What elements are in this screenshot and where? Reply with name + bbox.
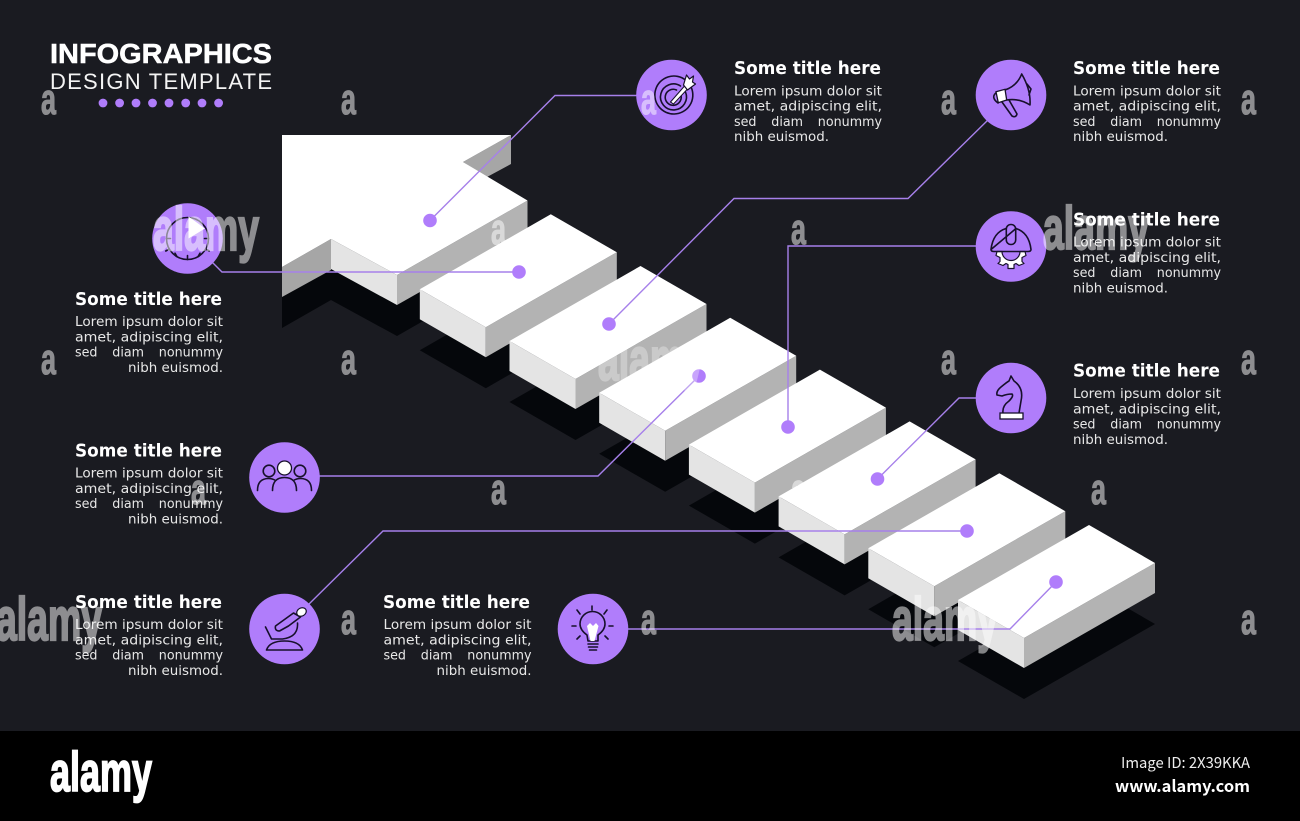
text block: top right: sed diam nonummy [1073,115,1221,130]
text block: upper left: Some title here [75,290,222,310]
text block: top right: Some title here [1073,59,1220,79]
text block: bottom middle: sed diam nonummy [384,649,532,664]
text block: middle right: Lorem ipsum dolor sit [1073,236,1221,251]
footer band [0,731,1300,821]
step block 6 [868,473,1065,616]
watermark overlay: a [491,465,506,514]
text block: middle left: amet, adipiscing elit, [75,482,223,497]
watermark overlay: alamy [0,586,102,653]
text block: top middle: amet, adipiscing elit, [734,100,882,115]
step block 3 [599,318,796,461]
watermark overlay: a [941,75,956,124]
watermark overlay: a [341,595,356,644]
arrow head [282,135,528,305]
text block: middle right: nibh euismod. [1073,282,1168,296]
text block: lower right: sed diam nonummy [1073,418,1221,433]
title: DESIGN TEMPLATE [50,69,272,94]
text block: bottom middle: nibh euismod. [436,664,532,679]
watermark overlay: a [791,465,806,514]
watermark overlay: a [641,595,656,644]
watermark overlay: alamy [1043,195,1149,262]
icon: team of people [249,442,320,513]
text block: middle left [75,442,223,527]
text block: top middle: Some title here [734,59,881,79]
text block: lower left: nibh euismod. [128,664,223,679]
text block: middle right: sed diam nonummy [1073,266,1221,281]
text block: upper left: nibh euismod. [128,361,223,376]
watermark overlay: a [1241,595,1256,644]
text block: lower left: sed diam nonummy [75,649,223,664]
text block: upper left: amet, adipiscing elit, [75,330,223,345]
text block: lower right [1073,362,1221,448]
icon: helmet with gear [976,211,1046,282]
text block: top right [1073,59,1221,145]
shadows under staircase [282,196,1155,699]
step block 7 [958,525,1155,668]
text block: bottom middle: amet, adipiscing elit, [384,633,532,648]
watermark overlay: a [341,75,356,124]
text block: lower right: amet, adipiscing elit, [1073,402,1221,417]
text block: upper left [75,290,223,376]
text block: bottom middle: Lorem ipsum dolor sit [384,618,532,633]
watermark overlay: a [41,75,56,124]
watermark overlay: alamy [598,326,704,393]
icon: microscope [249,594,320,664]
footer band: alamy [50,740,152,803]
text block: upper left: sed diam nonummy [75,346,223,361]
watermark overlay: a [791,205,806,254]
text block: upper left: Lorem ipsum dolor sit [75,315,223,330]
text block: middle right: amet, adipiscing elit, [1073,251,1221,266]
icon: stopwatch play [152,203,223,274]
watermark overlay: alamy [153,196,259,263]
watermark overlay [0,75,1256,653]
text block: top right: Lorem ipsum dolor sit [1073,84,1221,99]
footer band: www.alamy.com [1115,773,1250,797]
title: INFOGRAPHICS [50,38,272,69]
text block: top middle: sed diam nonummy [734,115,882,130]
text block: top right: nibh euismod. [1073,130,1168,145]
icon: chess knight [976,363,1046,433]
step block 1 [420,214,617,357]
text block: bottom middle: Some title here [383,593,530,613]
text block: lower right: nibh euismod. [1073,433,1168,448]
step block 4 [689,370,886,513]
text block: middle left: Lorem ipsum dolor sit [75,466,223,482]
watermark overlay: a [641,75,656,124]
watermark overlay: a [1241,75,1256,124]
icon: target with arrow [636,60,707,130]
text block: lower left: Lorem ipsum dolor sit [75,618,223,633]
watermark overlay: a [41,335,56,384]
text block: lower right: Lorem ipsum dolor sit [1073,387,1221,402]
watermark overlay: a [1241,335,1256,384]
text block: middle right: Some title here [1073,210,1220,230]
footer band: Image ID: 2X39KKA [1121,752,1251,773]
step block 2 [510,266,706,409]
text block: middle left: Some title here [75,442,222,462]
watermark overlay: a [941,335,956,384]
watermark overlay: a [341,335,356,384]
watermark overlay: alamy [892,586,998,653]
text block: middle right [1073,210,1221,296]
icon: light bulb [558,594,628,664]
text block: lower right: Some title here [1073,362,1220,382]
watermark overlay: a [491,205,506,254]
text block: top right: amet, adipiscing elit, [1073,100,1221,115]
text block: lower left [75,593,223,679]
text block: top middle [734,59,882,145]
text block: lower left: amet, adipiscing elit, [75,633,223,648]
connector lines with dots [210,96,1063,629]
text block: top middle: nibh euismod. [734,130,829,145]
text block: middle left: nibh euismod. [128,512,223,527]
icon: megaphone [976,60,1046,130]
text block: bottom middle [383,593,532,679]
text block: top middle: Lorem ipsum dolor sit [734,84,882,99]
text block: middle left: sed diam nonummy [75,497,223,512]
watermark overlay: a [191,465,206,514]
text block: lower left: Some title here [75,593,222,613]
watermark overlay: a [1091,465,1106,514]
title [50,38,272,107]
step block 5 [779,421,976,564]
